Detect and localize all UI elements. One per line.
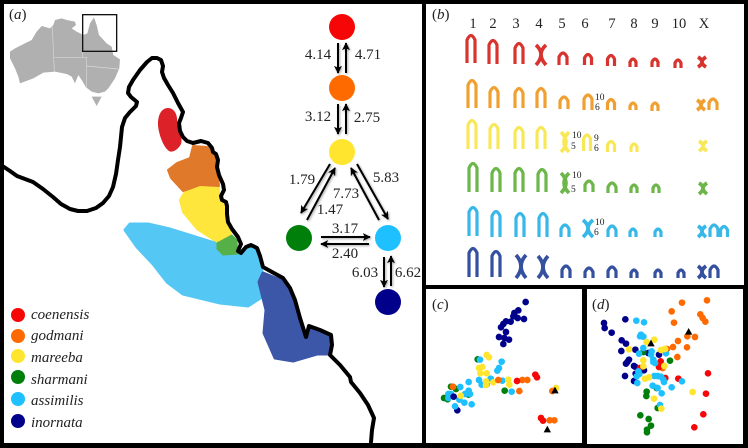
small labels: mareeba — [571, 131, 599, 154]
legend: mareeba — [31, 350, 83, 366]
panel label a: (a) — [9, 7, 26, 23]
network rates: 3.12 — [305, 109, 331, 125]
small labels: sharmani: 5 — [571, 185, 576, 195]
inset map of Australia — [10, 15, 120, 106]
network rates: 6.62 — [395, 265, 421, 281]
legend — [11, 307, 89, 431]
chromosome number header: 4 — [535, 16, 543, 32]
legend: godmani — [31, 328, 84, 344]
network rates: 4.71 — [355, 47, 381, 63]
panel a: distribution map and transition network — [4, 4, 422, 443]
chromosome number header: X — [699, 16, 710, 32]
panel c: scatter plot — [426, 289, 582, 443]
network circle: godmani — [329, 75, 355, 101]
small labels: mareeba: 6 — [594, 144, 599, 154]
region: inornata — [259, 273, 330, 361]
panel d: scatter plot — [587, 289, 743, 444]
small labels: mareeba: 9 — [594, 134, 599, 144]
network circle: mareeba — [329, 139, 355, 165]
network rates: 1.79 — [289, 172, 315, 188]
region: mareeba — [180, 187, 231, 242]
network rates: 5.83 — [373, 170, 399, 186]
network rates: 2.75 — [354, 110, 380, 126]
panel label d: (d) — [592, 297, 610, 313]
network rates: 2.40 — [332, 246, 358, 262]
network rates — [289, 47, 421, 281]
small labels: sharmani — [571, 171, 582, 195]
chromosome number header: 9 — [651, 16, 659, 32]
small labels: mareeba: 5 — [571, 142, 576, 152]
chromosome number header: 5 — [558, 16, 566, 32]
chromosome number header — [469, 16, 710, 32]
network rates: 1.47 — [317, 202, 344, 218]
small labels: sharmani: 10 — [572, 171, 582, 181]
chromosome number header: 10 — [672, 16, 686, 32]
chromosome number header: 1 — [469, 16, 477, 32]
scatter points d — [604, 300, 708, 432]
karyotype row: inornata — [469, 248, 718, 278]
chromosome number header: 8 — [630, 16, 638, 32]
small labels: assimilis — [594, 218, 605, 238]
network circle: inornata — [375, 289, 401, 315]
legend: assimilis — [31, 393, 84, 409]
chromosome number header: 7 — [608, 16, 616, 32]
network circle: sharmani — [286, 225, 312, 251]
panel b: karyotypes — [426, 4, 744, 285]
network circle: assimilis — [375, 225, 401, 251]
scatter points c — [444, 302, 559, 432]
network rates: 3.17 — [332, 221, 359, 237]
panel label b: (b) — [432, 7, 450, 23]
legend: sharmani — [31, 372, 88, 388]
panel label c: (c) — [432, 297, 449, 313]
coastline — [4, 58, 374, 442]
chromosome number header: 3 — [512, 16, 520, 32]
network circle: coenensis — [329, 14, 355, 40]
karyotype row: godmani — [468, 80, 717, 111]
karyotype row: sharmani — [469, 164, 707, 194]
small labels: assimilis: 10 — [595, 218, 605, 228]
network rates: 4.14 — [305, 47, 332, 63]
legend: inornata — [31, 415, 83, 431]
network arrows — [301, 43, 391, 287]
network rates: 6.03 — [352, 265, 378, 281]
network rates: 7.73 — [333, 186, 359, 202]
small labels: mareeba: 10 — [572, 131, 582, 141]
karyotype row: mareeba — [468, 120, 707, 152]
karyotype row: coenensis — [467, 36, 706, 68]
small labels: godmani: 10 — [595, 93, 605, 103]
small labels: godmani — [595, 93, 605, 113]
region: sharmani — [217, 235, 238, 255]
small labels: godmani: 6 — [595, 103, 600, 113]
region: godmani — [168, 146, 219, 191]
chromosome number header: 2 — [489, 16, 497, 32]
legend: coenensis — [31, 307, 89, 323]
region: coenensis — [158, 108, 182, 152]
small labels: assimilis: 6 — [594, 228, 599, 238]
chromosome number header: 6 — [581, 16, 589, 32]
karyotype row: assimilis — [469, 208, 728, 237]
region: assimilis — [125, 224, 262, 306]
